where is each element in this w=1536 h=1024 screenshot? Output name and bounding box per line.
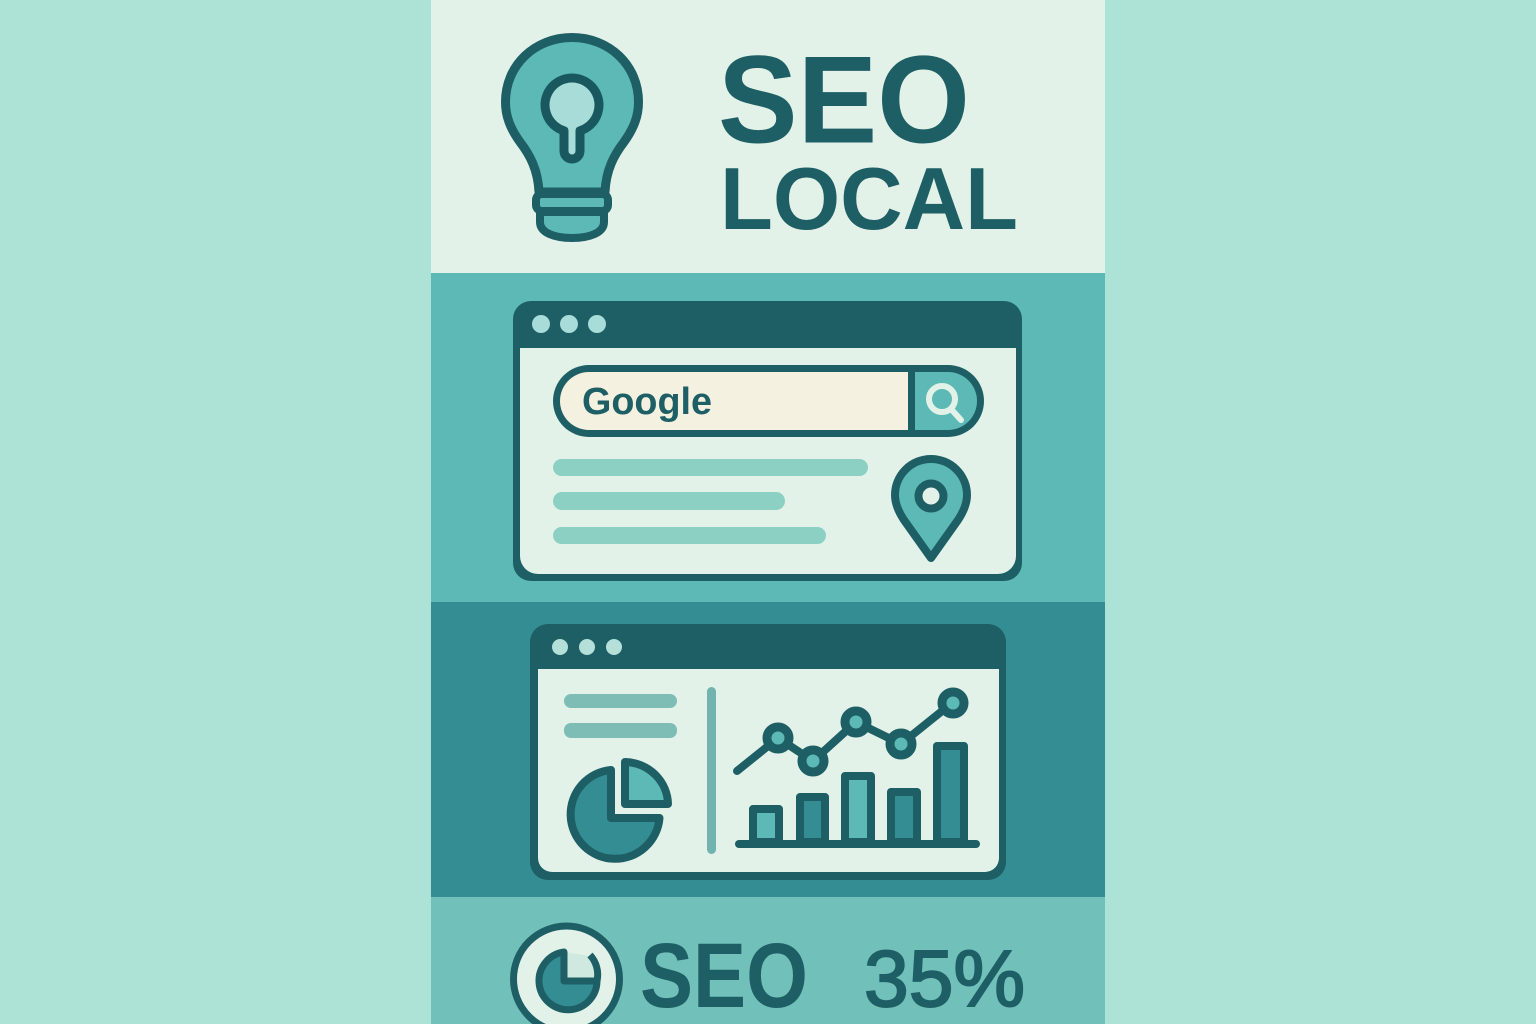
window dots (532, 315, 606, 333)
panel: search (431, 273, 1105, 602)
browser window: dashboard (530, 624, 1006, 880)
panel: header (431, 0, 1105, 273)
line chart (737, 692, 964, 772)
browser window: search results (513, 301, 1022, 581)
title: LOCAL: LOCAL (720, 149, 1018, 248)
icon: light bulb (506, 38, 638, 238)
panel: footer stat (431, 897, 1105, 1024)
label: SEO: SEO (640, 925, 808, 1024)
search bar (553, 365, 984, 437)
icon: magnifier (929, 386, 961, 420)
bar chart (735, 746, 980, 848)
Google wordmark: Google (582, 381, 712, 423)
icon: location pin (895, 459, 967, 558)
window dots (552, 639, 622, 655)
icon: round pie badge (514, 926, 620, 1024)
pie chart (571, 762, 668, 859)
result lines (553, 459, 868, 544)
vertical divider (707, 687, 716, 854)
panel: analytics (431, 602, 1105, 897)
stat: 35%: 35% (864, 934, 1025, 1023)
text lines (564, 694, 677, 738)
title: SEO: SEO (718, 32, 970, 170)
